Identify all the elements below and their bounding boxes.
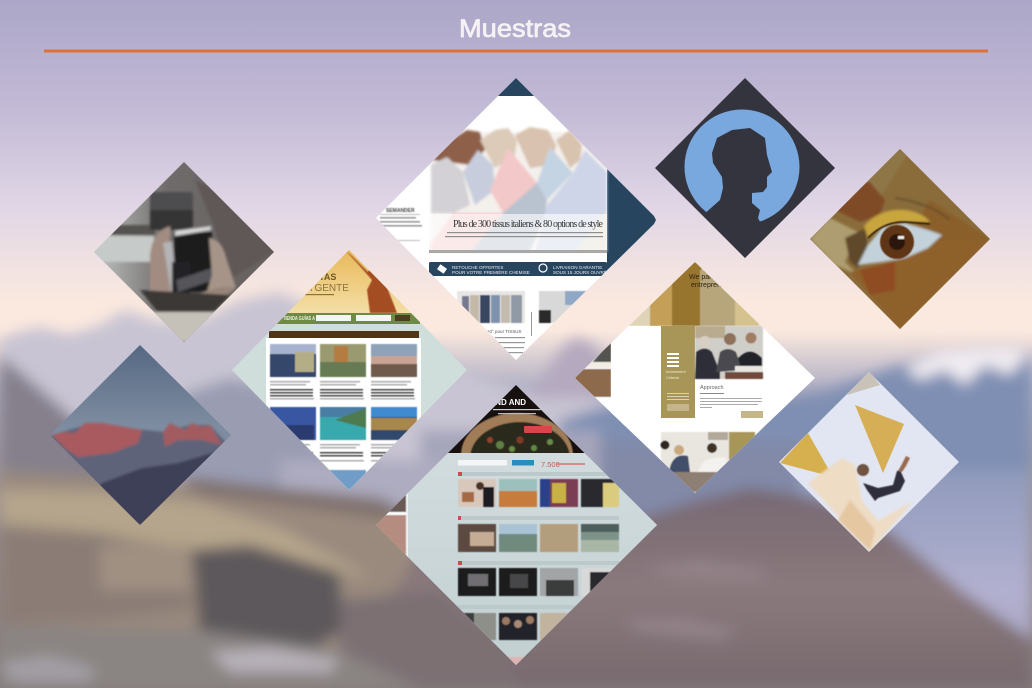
gold sidebar: Criteria [666,375,680,380]
small photo: shirts on rack [457,291,525,323]
category header bars [458,472,619,609]
sample: food and photo web page diamond [376,385,658,665]
white listing panel [266,338,421,490]
sample: profile silhouette diamond [655,78,835,258]
food header photo: IND AND [493,398,526,407]
divider under title [44,50,988,52]
left column text: SEMANDER [386,208,415,214]
hero photo: shirts on hangers [431,127,607,252]
gold triangle top [855,405,904,473]
icon: award badge [539,264,547,272]
skyline headline [689,274,735,289]
sample: business web page diamond [575,262,815,493]
green search bar: TIENDA GUÍAS A [283,314,315,322]
green search bar [270,313,420,324]
dark lower slope [100,452,214,525]
yellow header photo [286,250,412,314]
navy info bar: LIVRAISON GARANTIE [553,265,602,270]
left edge photo [376,453,408,593]
sample: dancer with gold triangles diamond [779,372,959,552]
icon: head silhouette [703,128,772,258]
gold sidebar: Investment [666,369,686,374]
red peaks right [163,423,222,447]
eye socket shadow [845,228,868,268]
dancer figure [857,456,910,501]
eye white [858,223,942,265]
text: approach [700,385,763,418]
icon: tag [437,264,447,274]
skyline headline: We partner [689,274,724,281]
blue circle [684,110,800,224]
lower meeting photo [660,432,755,492]
yellow header photo: TAS [319,272,336,282]
navy right panel [607,165,656,275]
gold triangle left [780,433,829,474]
search row with counter: 7.500 [541,460,560,469]
hero caption band [431,214,607,250]
brown nav bar [269,331,419,338]
red peaks left [52,423,142,457]
sample: travel web page diamond [232,250,467,490]
sample: eye painting diamond [810,149,990,329]
sample: shirts web page diamond [376,78,656,360]
listing text lines [270,381,415,462]
text: approach: Approach [700,385,724,391]
body text under photos [487,312,532,353]
gold eyelid [864,210,930,238]
search row with counter [458,460,585,469]
gold skyline photo [610,262,780,326]
yellow header photo: LA GENTE [300,283,349,294]
hero headline: Plus de 300 tissus italiens & 80 options de style [453,219,604,230]
meeting photo [695,326,763,379]
navy top tab [498,78,534,96]
body text under photos: 10° pour TISSUS [487,329,521,334]
gold sidebar [661,326,695,418]
sample: red mountain photo diamond [50,345,231,525]
hero caption lines [445,232,603,237]
thumbnail grid [458,479,619,665]
skyline headline: entrepreneurs [691,282,735,289]
search panel behind page content [408,453,658,665]
iris [868,222,930,259]
rock body [50,424,226,485]
navy info bar: POUR VOTRE PREMIÈRE CHEMISE [452,269,530,275]
navy info bar [429,262,610,276]
brow fold line [895,198,950,220]
title: Muestras [459,15,571,43]
left column text [380,208,422,241]
navy info bar: SOUS 15 JOURS OUVRÉS [553,269,610,275]
sample: camera photo diamond [94,162,274,342]
small photo: fabric detail [539,291,590,323]
food header photo [440,385,590,497]
icon: hand holding camera [150,192,236,300]
dancer dress [808,458,913,551]
listing photos [270,344,417,490]
left corner photo [575,337,611,407]
navy info bar: RETOUCHE OFFERTES [452,265,503,270]
